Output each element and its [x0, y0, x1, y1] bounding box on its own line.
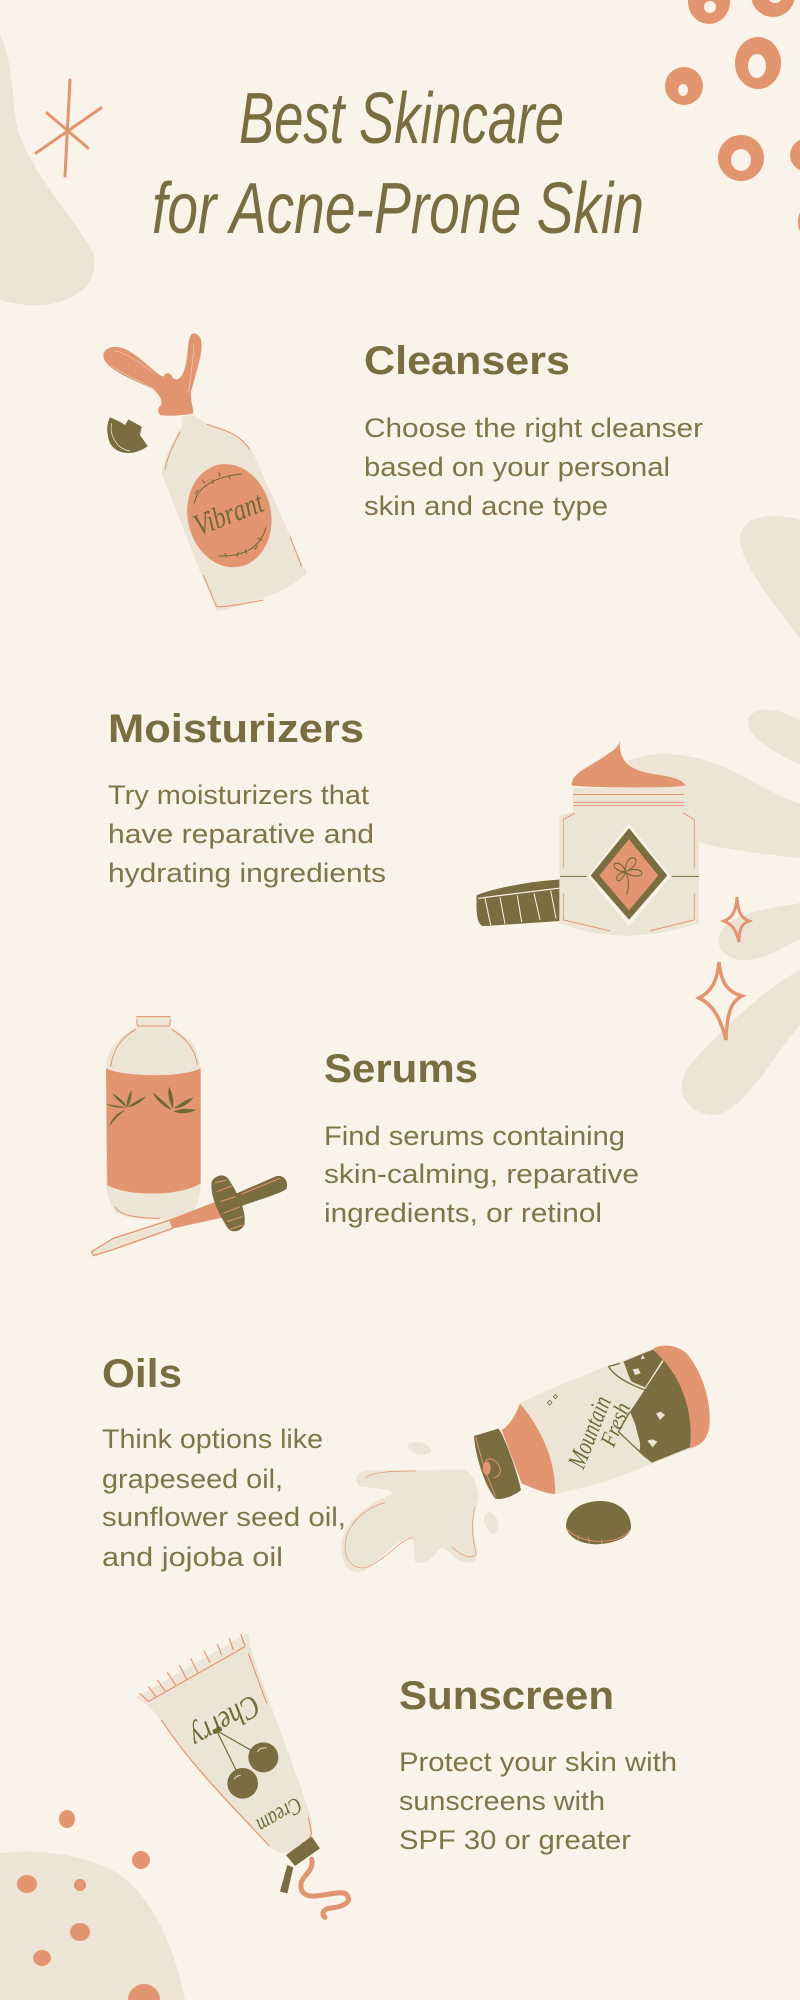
text: Sunscreen description: sunscreens with — [399, 1786, 605, 1816]
illustration: cleanser bottle — [103, 333, 307, 612]
title — [152, 79, 644, 249]
text: Moisturizers description: have reparative and — [108, 819, 374, 849]
jar side lines — [560, 875, 699, 878]
bottle label — [106, 1068, 201, 1194]
bottle label text: Mountain — [562, 1392, 617, 1473]
tube text: Cream — [252, 1791, 307, 1838]
tube cap base — [286, 1837, 320, 1866]
title: for Acne-Prone Skin — [152, 169, 644, 249]
jar outline accents — [563, 794, 694, 931]
oil spill — [341, 1440, 501, 1573]
blob: top left — [0, 35, 94, 305]
jar lid — [476, 879, 560, 926]
illustration: oil bottle spill — [341, 1346, 710, 1573]
text: Oils description: grapeseed oil, — [102, 1464, 283, 1494]
spill accents — [345, 1471, 476, 1568]
text: Sunscreen description — [399, 1747, 677, 1855]
text: Moisturizers description: hydrating ingredients — [108, 858, 386, 888]
dropper collar — [211, 1175, 245, 1231]
text: Sunscreen description: Protect your skin with — [399, 1747, 677, 1777]
loose bottle cap — [566, 1501, 631, 1544]
icon: asterisk star — [36, 80, 101, 176]
tube text: Cherry — [184, 1688, 267, 1757]
heading: Moisturizers: Moisturizers — [108, 707, 364, 751]
squeezed product ribbon — [301, 1859, 349, 1917]
blob: bottom left — [0, 1851, 185, 2000]
bottle body — [106, 1016, 201, 1219]
tube crimp lines — [140, 1634, 312, 1846]
text: Serums description: Find serums containing — [324, 1121, 625, 1151]
illustration: serum bottle and dropper — [92, 1016, 287, 1256]
cherries — [212, 1726, 278, 1799]
tube loose cap — [280, 1865, 293, 1893]
splash highlights — [111, 344, 194, 392]
bottle cap — [474, 1429, 521, 1499]
jar body — [559, 788, 699, 936]
bottle neck band — [502, 1403, 555, 1494]
icon: small sparkle — [724, 897, 749, 942]
tube text — [184, 1688, 307, 1838]
text: Serums description: ingredients, or retinol — [324, 1198, 602, 1228]
text: Serums description: skin-calming, reparative — [324, 1159, 639, 1189]
label text: Vibrant — [189, 485, 269, 543]
text: Oils description: Think options like — [102, 1424, 323, 1454]
blobs: right side hand shape — [627, 516, 800, 1115]
cap highlight — [111, 423, 130, 451]
bottle label text: Fresh — [595, 1399, 635, 1451]
decorative rings: top right — [665, 0, 800, 238]
mountain label — [608, 1349, 691, 1462]
heading: Serums: Serums — [324, 1047, 478, 1091]
text: Oils description: and jojoba oil — [102, 1542, 283, 1572]
decorative dots: bottom left — [17, 1810, 160, 2000]
bottle neck accents — [111, 1017, 197, 1218]
product splash — [103, 333, 202, 416]
text: Moisturizers description — [108, 780, 386, 888]
jar diamond label — [588, 823, 671, 926]
illustration: sunscreen tube — [136, 1633, 349, 1917]
bottle base band — [653, 1346, 710, 1448]
icon: large sparkle — [699, 962, 742, 1040]
text: Cleansers description: Choose the right cleanser — [364, 413, 703, 443]
text: Cleansers description — [364, 413, 703, 521]
bottle label text — [562, 1390, 635, 1480]
illustration: moisturizer jar — [476, 741, 699, 936]
bottle cap — [107, 417, 148, 453]
heading: Cleansers: Cleansers — [364, 339, 570, 383]
title: Best Skincare — [239, 79, 564, 159]
heading: Oils: Oils — [102, 1352, 182, 1396]
bottle body — [162, 414, 307, 612]
text: Moisturizers description: Try moisturizers that — [108, 780, 370, 810]
text: Oils description: sunflower seed oil, — [102, 1502, 346, 1532]
dropper glass tube — [92, 1220, 173, 1256]
leaves on label — [106, 1087, 196, 1127]
text: Serums description — [324, 1121, 639, 1228]
small stars on label — [547, 1395, 557, 1405]
bottle body — [502, 1348, 709, 1494]
dropper tube colored — [170, 1200, 227, 1228]
tube body — [136, 1633, 312, 1853]
text: Cleansers description: skin and acne type — [364, 491, 608, 521]
bottle outline accents — [165, 424, 302, 607]
dropper bulb — [237, 1176, 287, 1207]
text: Cleansers description: based on your personal — [364, 452, 670, 482]
jar cream — [572, 741, 686, 787]
text: Sunscreen description: SPF 30 or greater — [399, 1825, 631, 1855]
heading: Sunscreen: Sunscreen — [399, 1674, 614, 1718]
label leaf sprigs — [194, 473, 266, 557]
label oval — [178, 456, 281, 575]
text: Oils description — [102, 1424, 346, 1572]
